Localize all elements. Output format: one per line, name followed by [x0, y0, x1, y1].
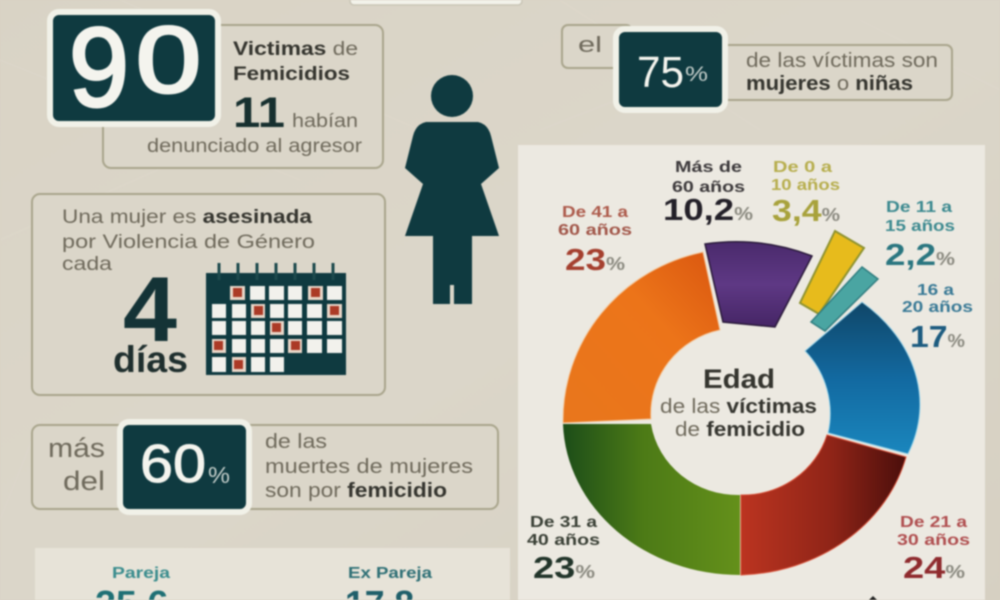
- icon: calendar: [206, 263, 346, 375]
- label: 31-40: 40 años: [527, 532, 600, 549]
- text: de las: de las: [265, 431, 327, 453]
- text: por violencia: por Violencia de Género: [62, 232, 315, 253]
- badge 60%: %: [208, 462, 230, 488]
- badge 60%: 60: [140, 434, 206, 494]
- label: 0-10: [771, 159, 840, 228]
- text: muertes: muertes de mujeres: [265, 456, 473, 478]
- label: mas de 60: 60 años: [672, 179, 745, 196]
- center title: [660, 364, 817, 441]
- slice: 0-10: [800, 231, 864, 314]
- label: 11-15: 2,2 %: [885, 237, 955, 272]
- label: 11-15: 15 años: [885, 218, 955, 235]
- label: 31-40: 23 %: [533, 550, 595, 585]
- text: de las victimas: de las víctimas son: [746, 50, 938, 72]
- slice: 16-20: [805, 302, 920, 454]
- label: mas de 60: 10,2 %: [663, 192, 753, 227]
- outline left box: [562, 25, 632, 68]
- number 4: 4: [123, 259, 177, 361]
- label: 41-60: [558, 204, 632, 277]
- panel: 60 percent: [32, 422, 498, 512]
- top white box fragment: [350, 0, 522, 5]
- text: el: el: [578, 32, 602, 57]
- label: mas de 60: Más de: [675, 159, 742, 176]
- number badge 90: 9: [69, 5, 129, 130]
- slice: 41-60: [563, 252, 720, 423]
- label: 16-20: 16 a: [917, 282, 954, 299]
- panel: partner stats: [35, 548, 510, 600]
- text: dias: días: [113, 339, 188, 380]
- text: mas: más: [48, 433, 105, 463]
- label: 11-15: De 11 a: [886, 199, 952, 216]
- label: mas de 60: [663, 159, 753, 227]
- panel: age donut chart: [518, 145, 985, 600]
- outline box: [32, 194, 385, 395]
- icon: woman figure: [405, 75, 499, 304]
- label: 16-20: 17%: [910, 319, 965, 354]
- center title: Edad: [703, 364, 775, 394]
- label: 31-40: [527, 514, 600, 585]
- label: ex pareja: Ex Pareja: [348, 565, 432, 582]
- label: 31-40: De 31 a: [530, 514, 597, 531]
- slice: 11-15: [811, 267, 878, 331]
- badge 60%: [120, 422, 249, 512]
- text: mujeres o ninas: mujeres o niñas: [746, 73, 913, 95]
- badge 75%: %: [685, 63, 708, 86]
- donut chart: [563, 231, 920, 575]
- text: victimas: Victimas de: [233, 39, 358, 60]
- outline box: [103, 25, 383, 168]
- number badge 90: 0: [136, 7, 201, 112]
- text: denunciado: denunciado al agresor: [147, 136, 363, 157]
- outline box: [32, 425, 498, 509]
- label: 41-60: 60 años: [558, 222, 632, 239]
- badge 75%: 75: [637, 48, 684, 97]
- label: 21-30: [897, 514, 970, 585]
- label: 0-10: De 0 a: [773, 159, 832, 176]
- slice: 31-40: [563, 424, 740, 575]
- center title: de las víctimas: [660, 396, 817, 418]
- label: 21-30: 24 %: [903, 550, 965, 585]
- number badge 90: [50, 5, 218, 130]
- text: una mujer: Una mujer es asesinada: [62, 207, 312, 228]
- text: cada: cada: [62, 254, 113, 275]
- label: 0-10: 3,4 %: [772, 193, 840, 228]
- label: 16-20: [902, 282, 973, 354]
- text: femicidios: Femicidios: [233, 64, 350, 85]
- slice: mas de 60: [705, 242, 812, 327]
- text: 11: 11: [233, 89, 285, 137]
- label: 21-30: De 21 a: [900, 514, 967, 531]
- center title: de femicidio: [675, 419, 805, 441]
- text: son por femicidio: son por femicidio: [265, 480, 447, 502]
- panel: 75 percent: [562, 25, 952, 110]
- label: 41-60: De 41 a: [562, 204, 628, 221]
- outline right box: [700, 45, 952, 100]
- text: del: del: [63, 466, 105, 496]
- text: habian: habían: [292, 111, 358, 132]
- badge 75%: [616, 29, 725, 110]
- small cut-off mark: [869, 596, 877, 600]
- label: 21-30: 30 años: [897, 532, 970, 549]
- panel: 90 victims: [50, 5, 383, 168]
- label: 16-20: 20 años: [902, 299, 973, 316]
- slice: 21-30: [741, 435, 906, 575]
- label: 41-60: 23 %: [565, 242, 625, 277]
- label: pareja: Pareja: [112, 565, 170, 582]
- panel: every 4 days: [32, 194, 385, 395]
- label: 0-10: 10 años: [771, 177, 840, 194]
- label: 11-15: [885, 199, 955, 272]
